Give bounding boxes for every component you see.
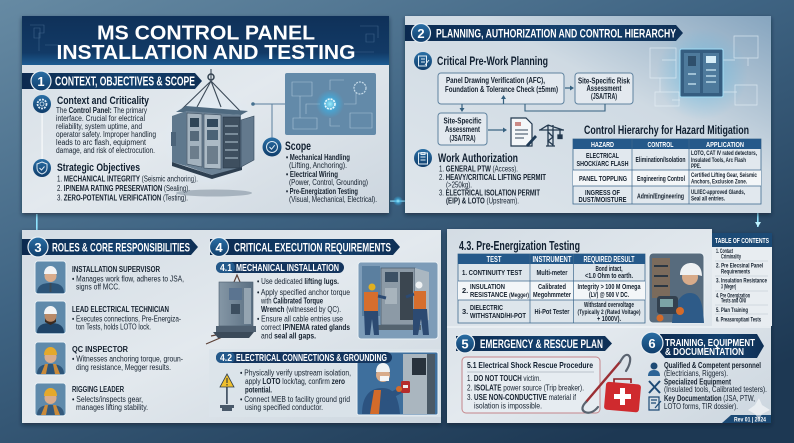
- table: pre-energization tests: <1.0 Ohm to earth.: [585, 273, 633, 280]
- icon: planning note: [414, 52, 432, 70]
- rescue procedure box: 3. USE NON-CONDUCTIVE material if: [467, 393, 577, 402]
- flow box: risk assessment: (JSA/TRA): [591, 92, 617, 101]
- table of contents: 2. Pre Elecsinal Panel: [716, 264, 763, 270]
- table of contents: 6. Preasoroptiani Tests: [716, 318, 761, 324]
- role text: signs off MCC.: [76, 282, 120, 292]
- table of contents: Requirements: [721, 270, 750, 276]
- table of contents: [712, 233, 772, 326]
- scope text: [285, 141, 377, 204]
- electrical connections bullets: apply LOTO lock/tag, confirm zero: [245, 377, 345, 386]
- table: pre-energization tests: Hi-Pot Tester: [534, 307, 570, 316]
- title banner: INSTALLATION AND TESTING: [56, 41, 356, 64]
- personnel text: [664, 361, 761, 378]
- icon: clipboard: [414, 149, 432, 167]
- section 4 header: CRITICAL EXECUTION REQUIREMENTS: [234, 240, 391, 254]
- section 1 header: 1: [37, 74, 45, 89]
- work authorization text: (>250kg).: [446, 180, 472, 190]
- panel: section 2 planning: [405, 16, 771, 213]
- revision tag: [722, 398, 771, 424]
- photo: technician with megger: [649, 253, 704, 323]
- subsection 4.2 header: ELECTRICAL CONNECTIONS & GROUNDING: [236, 352, 387, 364]
- flow box: site-specific assessment: Assessment: [445, 125, 480, 134]
- mechanical installation bullets: • Use dedicated lifting lugs.: [257, 277, 339, 286]
- section 5 header: 5: [461, 336, 469, 352]
- divider: [447, 326, 771, 328]
- panel: sections 3 and 4: [22, 230, 441, 423]
- role: rigging leader: [35, 383, 148, 416]
- role text: QC INSPECTOR: [72, 345, 128, 354]
- role text: ton Tests, holds LOTO lock.: [76, 322, 151, 332]
- role text: • Witnesses anchoring torque, groun-: [72, 354, 183, 364]
- role text: • Executes connections, Pre-Energiza-: [72, 314, 181, 324]
- role: qc inspector: [35, 342, 183, 375]
- context and criticality text: [56, 95, 156, 155]
- table: pre-energization tests: 1. CONTINUITY TEST: [462, 268, 522, 277]
- mechanical installation bullets: and seal all gaps.: [261, 332, 316, 340]
- table: pre-energization tests: DIELECTRIC: [470, 303, 503, 312]
- table: pre-energization tests: REQUIRED RESULT: [584, 255, 635, 264]
- mechanical installation bullets: • Ensure all cable entries use: [257, 314, 343, 324]
- section 4 header: [210, 238, 400, 256]
- rescue procedure box: 5.1 Electrical Shock Rescue Procedure: [467, 360, 593, 370]
- avatar: rigger: [35, 383, 66, 416]
- scope text: (Power, Control, Grounding): [289, 178, 368, 187]
- section 2 header: [405, 24, 683, 42]
- icon: tools: [649, 381, 660, 393]
- electrical connections bullets: potential.: [245, 386, 272, 394]
- table: pre-energization tests: 2.: [462, 286, 468, 295]
- table: pre-energization tests: Integrity > 100 M Omega: [578, 284, 641, 291]
- illustration: control panel on crane sling: [162, 69, 262, 196]
- revision tag: Rev 01 | 2024: [734, 418, 767, 424]
- role: lead electrical technician: [35, 301, 181, 334]
- context and criticality text: The Control Panel: The primary: [56, 106, 147, 115]
- role: installation supervisor: [35, 261, 184, 294]
- avatar: inspector: [35, 342, 66, 375]
- context and criticality text: operator safety. Improper handling: [56, 130, 156, 139]
- table: control hierarchy: Certified Lifting Gear, Seismic: [691, 172, 757, 179]
- panel: section 4.3 and lower sections: [447, 229, 772, 424]
- table: pre-energization tests: TEST: [486, 255, 502, 264]
- table: control hierarchy: Seal all entries.: [691, 196, 725, 202]
- icon: first aid kit: [604, 379, 641, 413]
- divider between icons: [42, 114, 43, 160]
- icon: gear: [33, 95, 51, 113]
- work authorization text: 1. GENERAL PTW (Access).: [439, 164, 518, 174]
- flow box: drawing verification: [438, 73, 564, 104]
- connector dot: [251, 102, 255, 106]
- personnel text: Qualified & Competent personnel: [664, 361, 761, 370]
- icon: document: [649, 397, 661, 410]
- personnel text: (Electricians, Riggers).: [664, 369, 728, 378]
- rescue procedure box: [462, 357, 600, 413]
- table: pre-energization tests: RESISTANCE (Megger): [470, 290, 529, 299]
- section 3 header: [22, 237, 198, 257]
- mechanical installation bullets: • Apply specified anchor torque: [257, 288, 350, 297]
- section 6 header: 6: [648, 336, 656, 351]
- documentation text: Key Documentation (JSA, PTW,: [664, 394, 755, 403]
- documentation text: [664, 394, 755, 411]
- work authorization text: Work Authorization: [438, 153, 518, 165]
- table: pre-energization tests: INSULATION: [470, 282, 505, 291]
- section 3 header: 3: [34, 240, 42, 255]
- table: pre-energization tests: INSTRUMENT: [532, 255, 572, 264]
- card: subsection 4.2: [209, 349, 441, 417]
- table of contents: Criminality: [721, 254, 741, 260]
- table: pre-energization tests: Calibrated: [538, 282, 566, 291]
- glowing connectors: [36, 196, 761, 230]
- table of contents: TABLE OF CONTENTS: [715, 238, 769, 245]
- scope text: (Visual, Mechanical, Electrical).: [289, 195, 377, 204]
- flow box: drawing verification: Panel Drawing Verification (AFC),: [446, 76, 545, 85]
- section 6 header: & DOCUMENTATION: [665, 346, 744, 358]
- subsection 4.2 header: [216, 352, 392, 364]
- panel: title and section 1: [22, 16, 389, 213]
- table: control hierarchy: LOTO, CAT IV rated detectors,: [691, 150, 757, 157]
- context and criticality text: leads to arc flash, equipment: [56, 138, 147, 147]
- role text: ding resistance, Megger results.: [76, 363, 171, 372]
- table of contents: 3. Insulation Resistance: [716, 278, 767, 284]
- section 1 header: CONTEXT, OBJECTIVES & SCOPE: [55, 74, 195, 88]
- scope text: • Electrical Wiring: [286, 170, 338, 179]
- strategic objectives text: 3. ZERO-POTENTIAL VERIFICATION (Testing).: [57, 194, 188, 202]
- table: pre-energization tests: Multi-meter: [536, 268, 568, 277]
- title banner: MS CONTROL PANEL: [97, 22, 315, 44]
- table of contents: 4. Pre Onergization: [716, 294, 750, 300]
- table of contents: 3 (Meger): [721, 284, 736, 290]
- context and criticality text: Context and Criticality: [57, 95, 150, 107]
- role text: • Manages work flow, adheres to JSA,: [72, 274, 184, 284]
- strategic objectives text: 1. MECHANICAL INTEGRITY (Seismic anchoring).: [57, 174, 198, 184]
- section 5 header: [456, 334, 612, 353]
- subsection 4.1: MECHANICAL INSTALLATION: [236, 262, 339, 274]
- subsection 4.1: 4.1: [220, 262, 232, 274]
- table of contents: Tests and ONI: [721, 298, 746, 304]
- equipment text: [664, 378, 767, 394]
- subsection 4.1: [216, 262, 344, 274]
- flow box: site-specific assessment: [438, 113, 487, 145]
- table: control hierarchy: PPE.: [691, 163, 701, 170]
- icon: shield: [33, 159, 51, 177]
- documentation text: LOTO forms, TIR dossier).: [664, 402, 738, 411]
- icon: tower crane: [539, 125, 564, 146]
- work authorization text: 3. ELECTRICAL ISOLATION PERMIT: [439, 188, 540, 198]
- mechanical installation bullets: Wrench (witnessed by QC).: [261, 305, 341, 314]
- icon: check badge: [262, 138, 282, 156]
- scope text: Scope: [285, 141, 311, 153]
- icon: warning and ground rod: [220, 374, 234, 411]
- table: pre-energization tests: WITHSTAND/HI-POT: [470, 311, 526, 320]
- flow box: risk assessment: Assessment: [586, 84, 622, 93]
- heading 4.3: 4.3. Pre-Energization Testing: [459, 239, 580, 253]
- flow box: risk assessment: Site-Specific Risk: [578, 76, 631, 86]
- context and criticality text: reliability, system uptime, and: [56, 122, 142, 131]
- table: control hierarchy: Elimination/Isolation: [636, 155, 686, 164]
- table: pre-energization tests: + 1000V).: [597, 316, 621, 323]
- flow box: site-specific assessment: (JSA/TRA): [450, 134, 476, 143]
- context and criticality text: damage, and risk of electrocution.: [56, 146, 155, 155]
- role text: INSTALLATION SUPERVISOR: [72, 265, 160, 274]
- table: control hierarchy: APPLICATION: [706, 140, 744, 149]
- scope text: • Mechanical Handling: [286, 153, 350, 162]
- electrical connections bullets: • Connect MEB to facility ground grid: [240, 395, 350, 404]
- table: pre-energization tests: [458, 254, 645, 323]
- table of contents: 1. Contact: [716, 249, 733, 255]
- role text: • Selects/inspects gear,: [72, 395, 143, 404]
- role text: [72, 385, 148, 412]
- icon: rescue hook: [582, 355, 630, 413]
- work authorization text: 2. HEAVY/CRITICAL LIFTING PERMIT: [439, 173, 546, 182]
- flow box: risk assessment: [575, 73, 633, 104]
- table: control hierarchy: SHOCK/ARC FLASH: [576, 159, 628, 168]
- table: control hierarchy: PANEL TOPPLING: [579, 174, 627, 183]
- role text: [72, 265, 184, 292]
- table: control hierarchy: HAZARD: [591, 140, 614, 149]
- section 4 header: 4: [215, 240, 223, 255]
- role text: LEAD ELECTRICAL TECHNICIAN: [72, 305, 169, 314]
- table: control hierarchy: INGRESS OF: [585, 188, 620, 197]
- role text: manages lifting stability.: [76, 403, 148, 412]
- scope text: • Pre-Energization Testing: [286, 187, 358, 196]
- table: pre-energization tests: (LV) @ 500 V DC.: [589, 292, 629, 299]
- photo: technician applying loto: [357, 352, 438, 415]
- table: pre-energization tests: Megohmmeter: [533, 290, 571, 299]
- arrows between boxes: [460, 86, 605, 112]
- electrical connections bullets: [240, 368, 351, 412]
- flow box: drawing verification: Foundation & Tolerance Check (±5mm): [445, 85, 558, 94]
- section 6 header: [641, 332, 764, 358]
- context and criticality text: interface. Crucial for electrical: [56, 114, 145, 123]
- equipment text: Specialized Equipment: [664, 378, 731, 386]
- role text: RIGGING LEADER: [72, 385, 124, 394]
- table: pre-energization tests: 3.: [462, 307, 468, 316]
- blueprint screen: [285, 73, 376, 135]
- table: control hierarchy: Engineering Control: [637, 174, 685, 183]
- illustration: panel on anchor base: [206, 275, 256, 344]
- table: control hierarchy: Admin/Engineering: [637, 192, 684, 200]
- table: control hierarchy: [573, 139, 761, 204]
- arrow to permit document: [488, 128, 507, 132]
- illustration: glowing panel schematic: [650, 28, 758, 120]
- rescue procedure box: 1. DO NOT TOUCH victim.: [467, 374, 541, 383]
- table: control hierarchy: Insulated Tools, Arc Flash: [691, 157, 746, 164]
- icon: personnel: [648, 362, 660, 376]
- subsection 4.2 header: 4.2: [220, 352, 232, 364]
- strategic objectives text: Strategic Objectives: [57, 162, 140, 174]
- title banner: [22, 16, 389, 65]
- avatar: supervisor: [35, 261, 66, 294]
- strategic objectives text: [57, 162, 198, 202]
- electrical connections bullets: • Physically verify upstream isolation,: [240, 368, 351, 378]
- section 3 header: ROLES & CORE RESPONSIBILITIES: [52, 240, 190, 254]
- mechanical installation bullets: [257, 277, 350, 340]
- work authorization text: [438, 153, 546, 206]
- section 6 header: TRAINING, EQUIPMENT: [665, 337, 755, 349]
- table: control hierarchy: Anchors, Exclusion Zone.: [691, 178, 747, 186]
- mechanical installation bullets: with Calibrated Torque: [260, 296, 323, 306]
- role text: [72, 345, 183, 372]
- table: pre-energization tests: Bond intact,: [596, 266, 623, 273]
- control hierarchy heading: Control Hierarchy for Hazard Mitigation: [584, 125, 749, 137]
- role text: [72, 305, 181, 332]
- electrical connections bullets: using specified conductor.: [245, 403, 323, 412]
- section 1 header: [22, 71, 202, 91]
- table: control hierarchy: UL/IEC-approved Glands,: [691, 189, 745, 196]
- scope text: (Lifting, Anchoring).: [289, 161, 347, 170]
- icon: permit document: [511, 118, 537, 147]
- work authorization text: (EIP) & LOTO (Upstream).: [446, 196, 519, 206]
- flow box: site-specific assessment: Site-Specific: [444, 116, 482, 126]
- table: pre-energization tests: Withstand overvoltage: [584, 302, 634, 309]
- table of contents: 5. Plan Training: [716, 308, 748, 314]
- rescue procedure box: 2. ISOLATE power source (Trip breaker).: [467, 384, 584, 392]
- section 2 header: 2: [417, 26, 425, 41]
- table: control hierarchy: ELECTRICAL: [586, 151, 619, 160]
- critical pre-work planning heading: Critical Pre-Work Planning: [437, 56, 548, 68]
- avatar: technician: [35, 301, 66, 334]
- section 2 header: PLANNING, AUTHORIZATION AND CONTROL HIERARCHY: [436, 26, 676, 40]
- connector to scope: [253, 104, 285, 138]
- strategic objectives text: 2. IP/NEMA RATING PRESERVATION (Sealing).: [57, 184, 190, 193]
- table: control hierarchy: DUST/MOISTURE: [578, 195, 627, 204]
- table: control hierarchy: CONTROL: [648, 140, 674, 149]
- section 5 header: EMERGENCY & RESCUE PLAN: [480, 339, 603, 351]
- equipment text: (Insulated tools, Calibrated testers).: [664, 385, 767, 394]
- table: pre-energization tests: (Typically 2 (Rated Voltage): [578, 309, 640, 316]
- mechanical installation bullets: correct IP/NEMA rated glands: [261, 323, 350, 332]
- photo: technicians at cabinet: [358, 262, 438, 339]
- rescue procedure box: isolation is impossible.: [474, 402, 542, 410]
